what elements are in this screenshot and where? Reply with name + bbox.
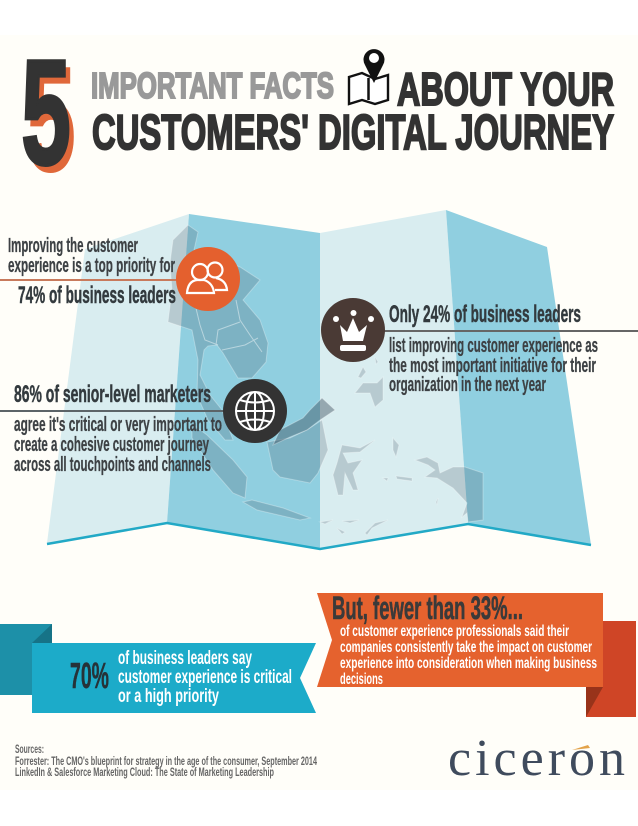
callout rule [0, 410, 226, 412]
ribbon: 70% of business leaders [0, 624, 316, 713]
ribbon front [32, 643, 316, 713]
icon: people [176, 247, 240, 311]
callout body line 1: agree it's critical or very important to [14, 414, 222, 436]
callout rule [380, 330, 638, 332]
logo: ciceron [448, 730, 625, 787]
icon: crown [321, 298, 385, 362]
ribbon text line 3: or a high priority [118, 686, 219, 707]
icon: map with location pin [349, 49, 388, 104]
ribbon statistic: 70% [70, 655, 109, 696]
new guinea [415, 457, 483, 522]
folded map [47, 210, 591, 549]
sources [15, 744, 317, 779]
map panel: far right blue [446, 210, 591, 545]
map panel: far left light [47, 214, 189, 543]
ribbon text line 4: decisions [340, 671, 383, 688]
ribbon front [317, 593, 603, 687]
callout intro text line 2: experience is a top priority for [8, 255, 175, 277]
big number 5: 5 [21, 28, 71, 196]
callout: only 24% of business leaders [321, 298, 638, 396]
callout: 86% of senior-level marketers [0, 379, 287, 476]
icon: globe [223, 379, 287, 443]
callout statistic: 86% of senior-level marketers [14, 381, 211, 408]
map panel: centre right light [320, 210, 468, 548]
sulawesi [333, 440, 375, 495]
borneo [267, 420, 328, 483]
big number 5 [21, 28, 76, 203]
maluku and small islands [320, 438, 438, 535]
mainland south-east asia [168, 225, 268, 440]
source 1: Forrester: The CMO's blueprint for strategy in the age of the consumer, September 2014 [15, 756, 317, 768]
map panel: centre left blue [167, 214, 320, 548]
ribbon back tail [586, 621, 636, 717]
logo wordmark: ciceron [448, 730, 625, 787]
logo accent [572, 745, 590, 750]
callout rule [0, 279, 182, 281]
ribbon text line 2: customer experience is critical [118, 667, 292, 688]
heading line 1 grey: IMPORTANT FACTS [91, 65, 334, 106]
callout body line 3: across all touchpoints and channels [14, 454, 211, 476]
big number 5: 5 [26, 35, 76, 203]
callout statistic: 74% of business leaders [18, 282, 176, 309]
land masses [168, 225, 483, 535]
ribbon fold [586, 687, 603, 717]
callout: 74% of business leaders [0, 235, 240, 311]
title block [21, 28, 614, 203]
map bottom edge [47, 523, 591, 549]
sources label: Sources: [15, 744, 44, 756]
land borders [194, 300, 262, 352]
philippines [355, 357, 383, 407]
sumatra [192, 424, 247, 498]
callout intro text: Improving the customer [8, 235, 138, 257]
ribbon fold [32, 624, 52, 643]
java [243, 500, 310, 520]
source 2: LinkedIn & Salesforce Marketing Cloud: The State of Marketing Leadership [15, 767, 274, 779]
ribbon text line 1: of business leaders say [118, 648, 252, 669]
borneo north [273, 398, 335, 445]
ribbon back tail [0, 624, 52, 695]
callout body line 2: create a cohesive customer journey [14, 434, 210, 456]
ribbon: fewer than 33% [317, 590, 636, 717]
